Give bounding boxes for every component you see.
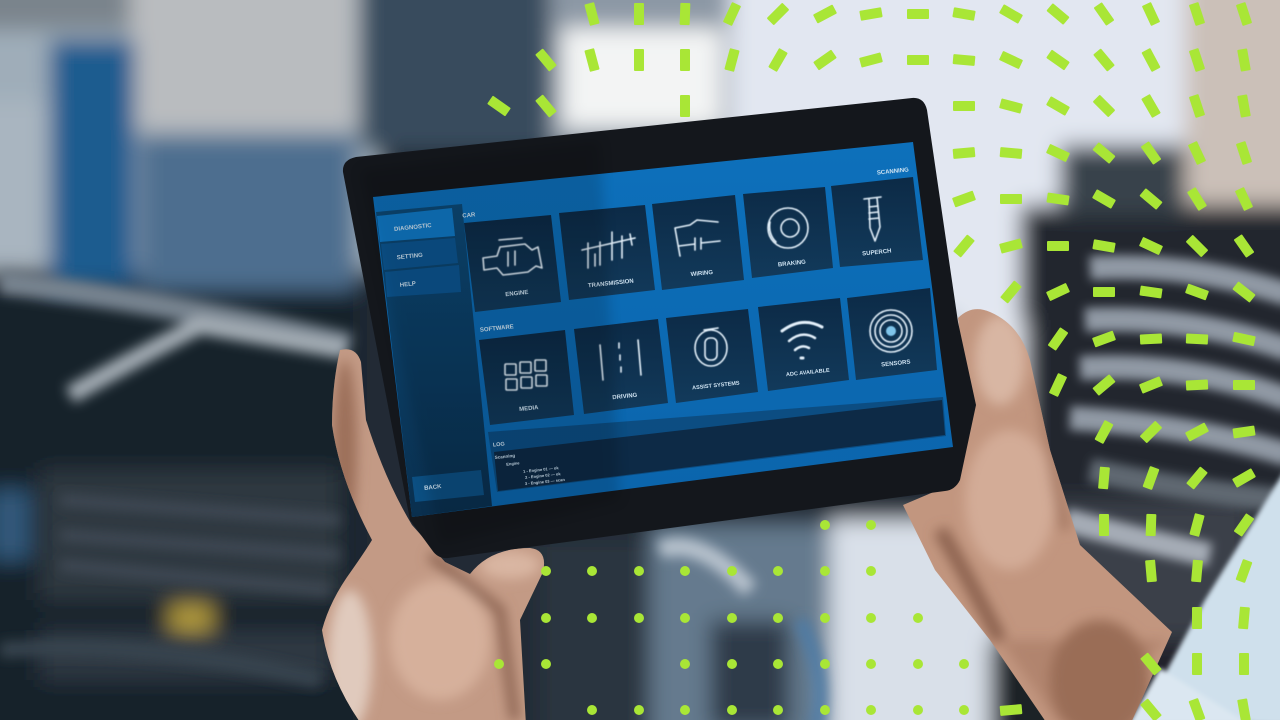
- right hand and forearm: [903, 309, 1172, 720]
- dark band: [488, 397, 946, 492]
- tab: setting: [381, 238, 458, 270]
- left hand: [322, 349, 544, 720]
- tile: supercharger: [831, 177, 923, 267]
- green dash and dot field: [487, 2, 1256, 720]
- tile: sensors: SENSORS: [881, 359, 911, 369]
- log panel: Engine: [506, 460, 521, 467]
- tile: media: MEDIA: [519, 405, 539, 413]
- screen reflection: [360, 140, 620, 545]
- tab: back: BACK: [424, 484, 442, 492]
- tile: wifi: [758, 298, 849, 391]
- tile: brake: BRAKING: [778, 260, 806, 268]
- tile: wiring: [652, 195, 744, 290]
- tile: media: [479, 330, 574, 425]
- log panel: 1 - Engine 01 — ok: [523, 465, 560, 474]
- blurred grille stripes: [1065, 267, 1280, 555]
- tile: supercharger: SUPERCH: [862, 248, 892, 258]
- log panel: 3 - Engine 03 — scan: [525, 477, 566, 486]
- tab: help: [385, 265, 461, 297]
- tile: wifi: ADC AVAILABLE: [786, 368, 830, 378]
- log panel: [493, 400, 945, 491]
- blurred engine parts: [0, 282, 820, 720]
- log panel: Scanning: [495, 453, 515, 460]
- tile: assist systems: ASSIST SYSTEMS: [692, 380, 740, 391]
- tablet body: [343, 98, 976, 558]
- tile: transmission: TRANSMISSION: [588, 279, 634, 289]
- tile: brake: [743, 187, 833, 278]
- tile: transmission: [559, 205, 655, 300]
- log panel: 2 - Engine 02 — ok: [525, 471, 562, 480]
- tab: diagnostic: [377, 208, 455, 242]
- section label: car: CAR: [462, 212, 476, 220]
- tile: sensors: [847, 288, 937, 380]
- tile: engine: [464, 215, 561, 312]
- tab: diagnostic: DIAGNOSTIC: [394, 223, 433, 233]
- person shirt: [1128, 470, 1280, 720]
- log panel: LOG: [493, 441, 505, 449]
- header bar text: SCANNING: [877, 167, 909, 177]
- tile: wiring: WIRING: [690, 270, 714, 278]
- screen: [373, 142, 953, 517]
- tile: engine: ENGINE: [505, 290, 529, 298]
- tablet: [343, 98, 976, 558]
- tab: setting: SETTING: [397, 253, 423, 261]
- tile: driving: DRIVING: [612, 393, 638, 401]
- tab: help: HELP: [400, 281, 416, 289]
- tile: assist systems: [666, 309, 758, 403]
- section label: software: SOFTWARE: [480, 324, 514, 334]
- tab: back: [412, 470, 484, 502]
- tile: driving: [574, 319, 668, 414]
- sidebar: [376, 204, 492, 517]
